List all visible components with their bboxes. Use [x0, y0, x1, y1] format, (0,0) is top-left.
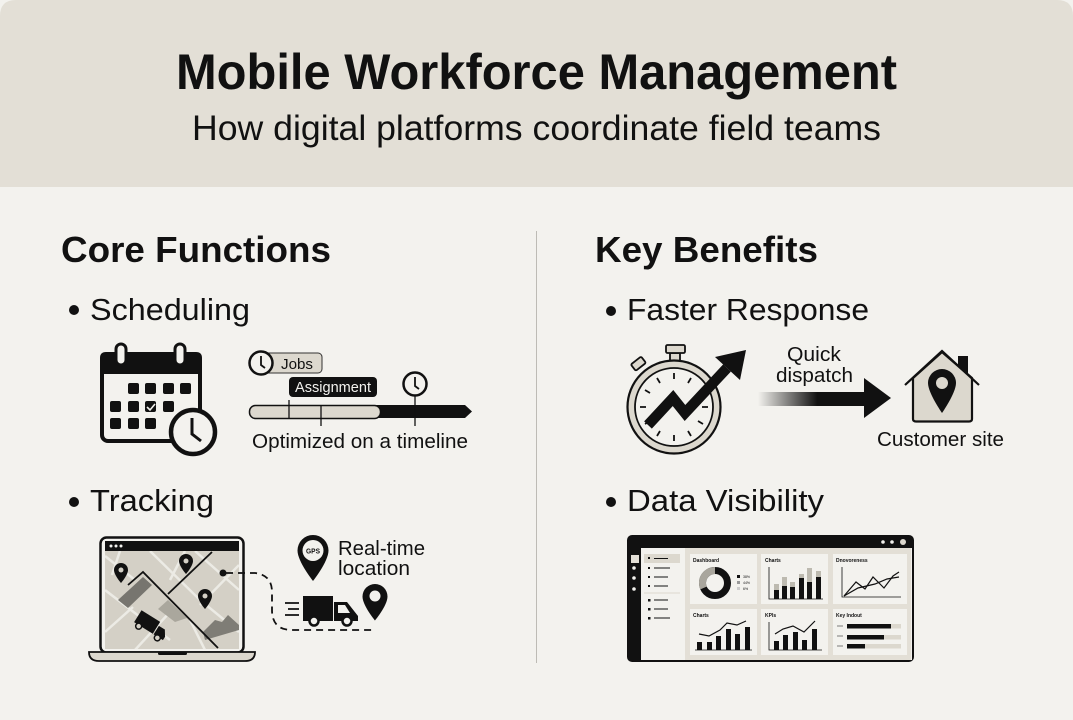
- map pins: [114, 554, 212, 609]
- assignment pill: Assignment: [295, 379, 372, 396]
- horizontal bars: [837, 624, 901, 648]
- icon: laptop map: [89, 538, 255, 661]
- donut chart: 38%: [743, 575, 750, 579]
- caption: quick dispatch: dispatch: [776, 365, 853, 387]
- caption: quick dispatch: Quick: [787, 344, 842, 366]
- chart: scheduling timeline: [250, 352, 472, 453]
- caption: real-time location: location: [338, 558, 410, 580]
- line chart: [842, 567, 901, 597]
- icon: gps pin: GPS: [306, 546, 320, 556]
- timeline bar: [250, 372, 472, 426]
- caption: timeline: Optimized on a timeline: [252, 431, 468, 453]
- subheading: scheduling: Scheduling: [90, 292, 250, 327]
- icon: map truck: [134, 610, 166, 642]
- icon: dashed route: [220, 570, 372, 630]
- donut chart: 44%: [743, 581, 750, 585]
- icon: calendar with clock: [100, 344, 215, 454]
- icon: house with pin: [905, 351, 979, 422]
- subheading: data visibility: Data Visibility: [627, 483, 825, 518]
- bar and line chart: [695, 621, 752, 650]
- heading: core functions: Core Functions: [61, 229, 331, 270]
- caption: real-time location: [338, 538, 425, 580]
- chart: dashboard: Dnovoreness: [836, 558, 868, 564]
- title: Mobile Workforce Management: [176, 44, 897, 100]
- subtitle: How digital platforms coordinate field teams: [192, 109, 881, 148]
- kpi chart: [769, 621, 822, 650]
- subheading: faster response: Faster Response: [627, 292, 869, 327]
- caption: customer site: Customer site: [877, 429, 1004, 451]
- stacked bar chart: [769, 567, 823, 599]
- donut chart: [702, 570, 750, 596]
- donut chart: 6%: [743, 587, 748, 591]
- icon: destination pin: [362, 584, 388, 620]
- jobs pill: Jobs: [281, 356, 313, 373]
- chart: dashboard: KPIs: [765, 613, 776, 619]
- chart: dashboard: [627, 535, 914, 662]
- chart: dashboard: Key Indout: [836, 613, 862, 619]
- arrow: dispatch: [758, 378, 891, 418]
- subheading: tracking: Tracking: [90, 483, 214, 518]
- jobs pill: [250, 352, 322, 374]
- icon: gps pin: [298, 535, 328, 581]
- panel: key benefits: [595, 229, 1004, 662]
- chart: dashboard: Dashboard: [693, 558, 719, 564]
- heading: key benefits: Key Benefits: [595, 229, 818, 270]
- icon: stopwatch with rising arrow: [628, 345, 746, 454]
- caption: quick dispatch: [776, 344, 853, 387]
- chart: dashboard: Charts: [765, 558, 781, 564]
- header band: [0, 0, 1073, 187]
- icon: delivery truck: [285, 596, 358, 626]
- chart: dashboard: Charts: [693, 613, 709, 619]
- caption: real-time location: Real-time: [338, 538, 425, 560]
- panel: core functions: [61, 229, 472, 661]
